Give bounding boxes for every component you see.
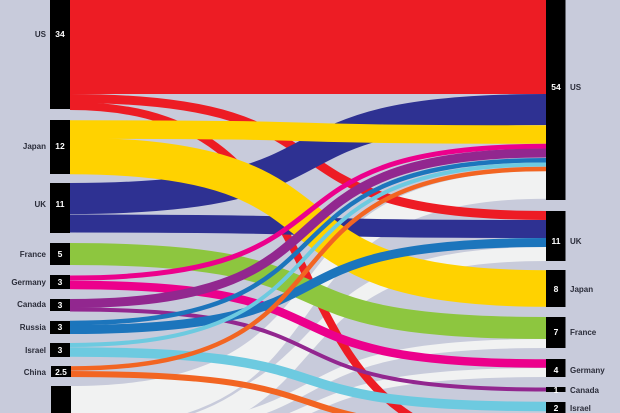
flow: Germany to US — [70, 146, 546, 278]
right country labels: Germany — [570, 366, 605, 375]
flow: China to other — [70, 374, 546, 413]
left country labels: Germany — [11, 278, 47, 287]
flow: China to US — [70, 169, 546, 368]
left country labels: China — [24, 368, 47, 377]
right values: 1 — [554, 385, 559, 395]
left values: 5 — [58, 249, 63, 259]
left values: 34 — [55, 29, 65, 39]
flow: Russia to US — [70, 160, 546, 323]
right values: 11 — [552, 236, 561, 246]
right country labels: Japan — [570, 285, 593, 294]
flow: US to US and lower red strands — [70, 0, 546, 413]
left values: 2.5 — [55, 367, 67, 377]
right values: 54 — [551, 82, 561, 92]
right country labels — [570, 83, 605, 413]
left country labels: US — [35, 30, 47, 39]
left values: 3 — [58, 322, 63, 332]
flow: Canada to Canada — [70, 310, 546, 390]
left country labels: Israel — [25, 346, 46, 355]
left country labels: Russia — [20, 323, 47, 332]
flow: France — [70, 254, 546, 328]
right country labels: Israel — [570, 404, 591, 413]
flow: Israel to US — [70, 164, 546, 345]
left values: 11 — [56, 199, 65, 209]
flow: Japan — [70, 130, 546, 288]
right values — [551, 82, 561, 413]
flow: UK — [70, 110, 546, 229]
right values: 4 — [554, 365, 559, 375]
left country labels: France — [20, 250, 47, 259]
left axis bars — [50, 0, 71, 413]
left country labels — [11, 30, 47, 377]
left values: 12 — [55, 141, 65, 151]
right country labels: Canada — [570, 386, 599, 395]
flow: Israel to Israel — [70, 352, 546, 406]
right country labels: UK — [570, 237, 582, 246]
flow: Canada to US — [70, 153, 546, 304]
flow: Germany to Germany — [70, 285, 546, 364]
left country labels: Japan — [23, 142, 46, 151]
right country labels: US — [570, 83, 582, 92]
pale flows from other countries — [70, 171, 546, 413]
flow: Russia to UK — [70, 242, 546, 330]
left values: 3 — [58, 277, 63, 287]
left values — [55, 29, 67, 377]
right values: 7 — [554, 327, 559, 337]
right values: 2 — [554, 403, 559, 413]
right axis bars — [546, 0, 566, 413]
right values: 8 — [554, 284, 559, 294]
left values: 3 — [58, 345, 63, 355]
right country labels: France — [570, 328, 597, 337]
left country labels: UK — [34, 200, 46, 209]
left country labels: Canada — [17, 300, 47, 309]
left values: 3 — [58, 300, 63, 310]
